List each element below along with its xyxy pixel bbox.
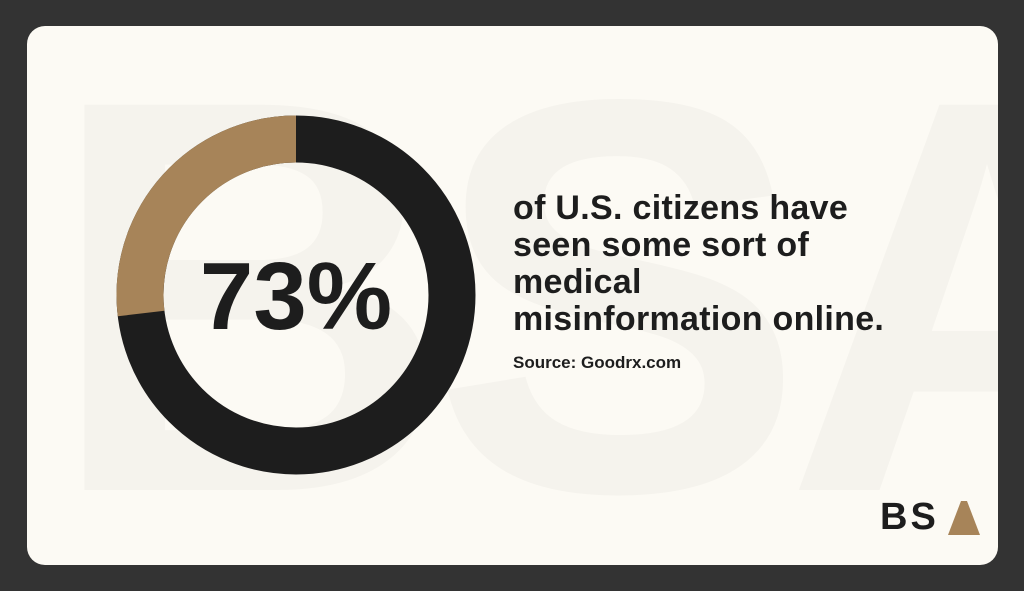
logo [880, 496, 980, 538]
source: Source: Goodrx.com [513, 353, 681, 372]
statement text: of U.S. citizens have [513, 189, 848, 227]
statement text: misinformation online. [513, 300, 884, 338]
logo: BS [880, 496, 939, 538]
statement text [513, 189, 884, 338]
donut chart: 73% [200, 243, 392, 350]
statement text: medical [513, 263, 642, 301]
statement text: seen some sort of [513, 226, 809, 264]
